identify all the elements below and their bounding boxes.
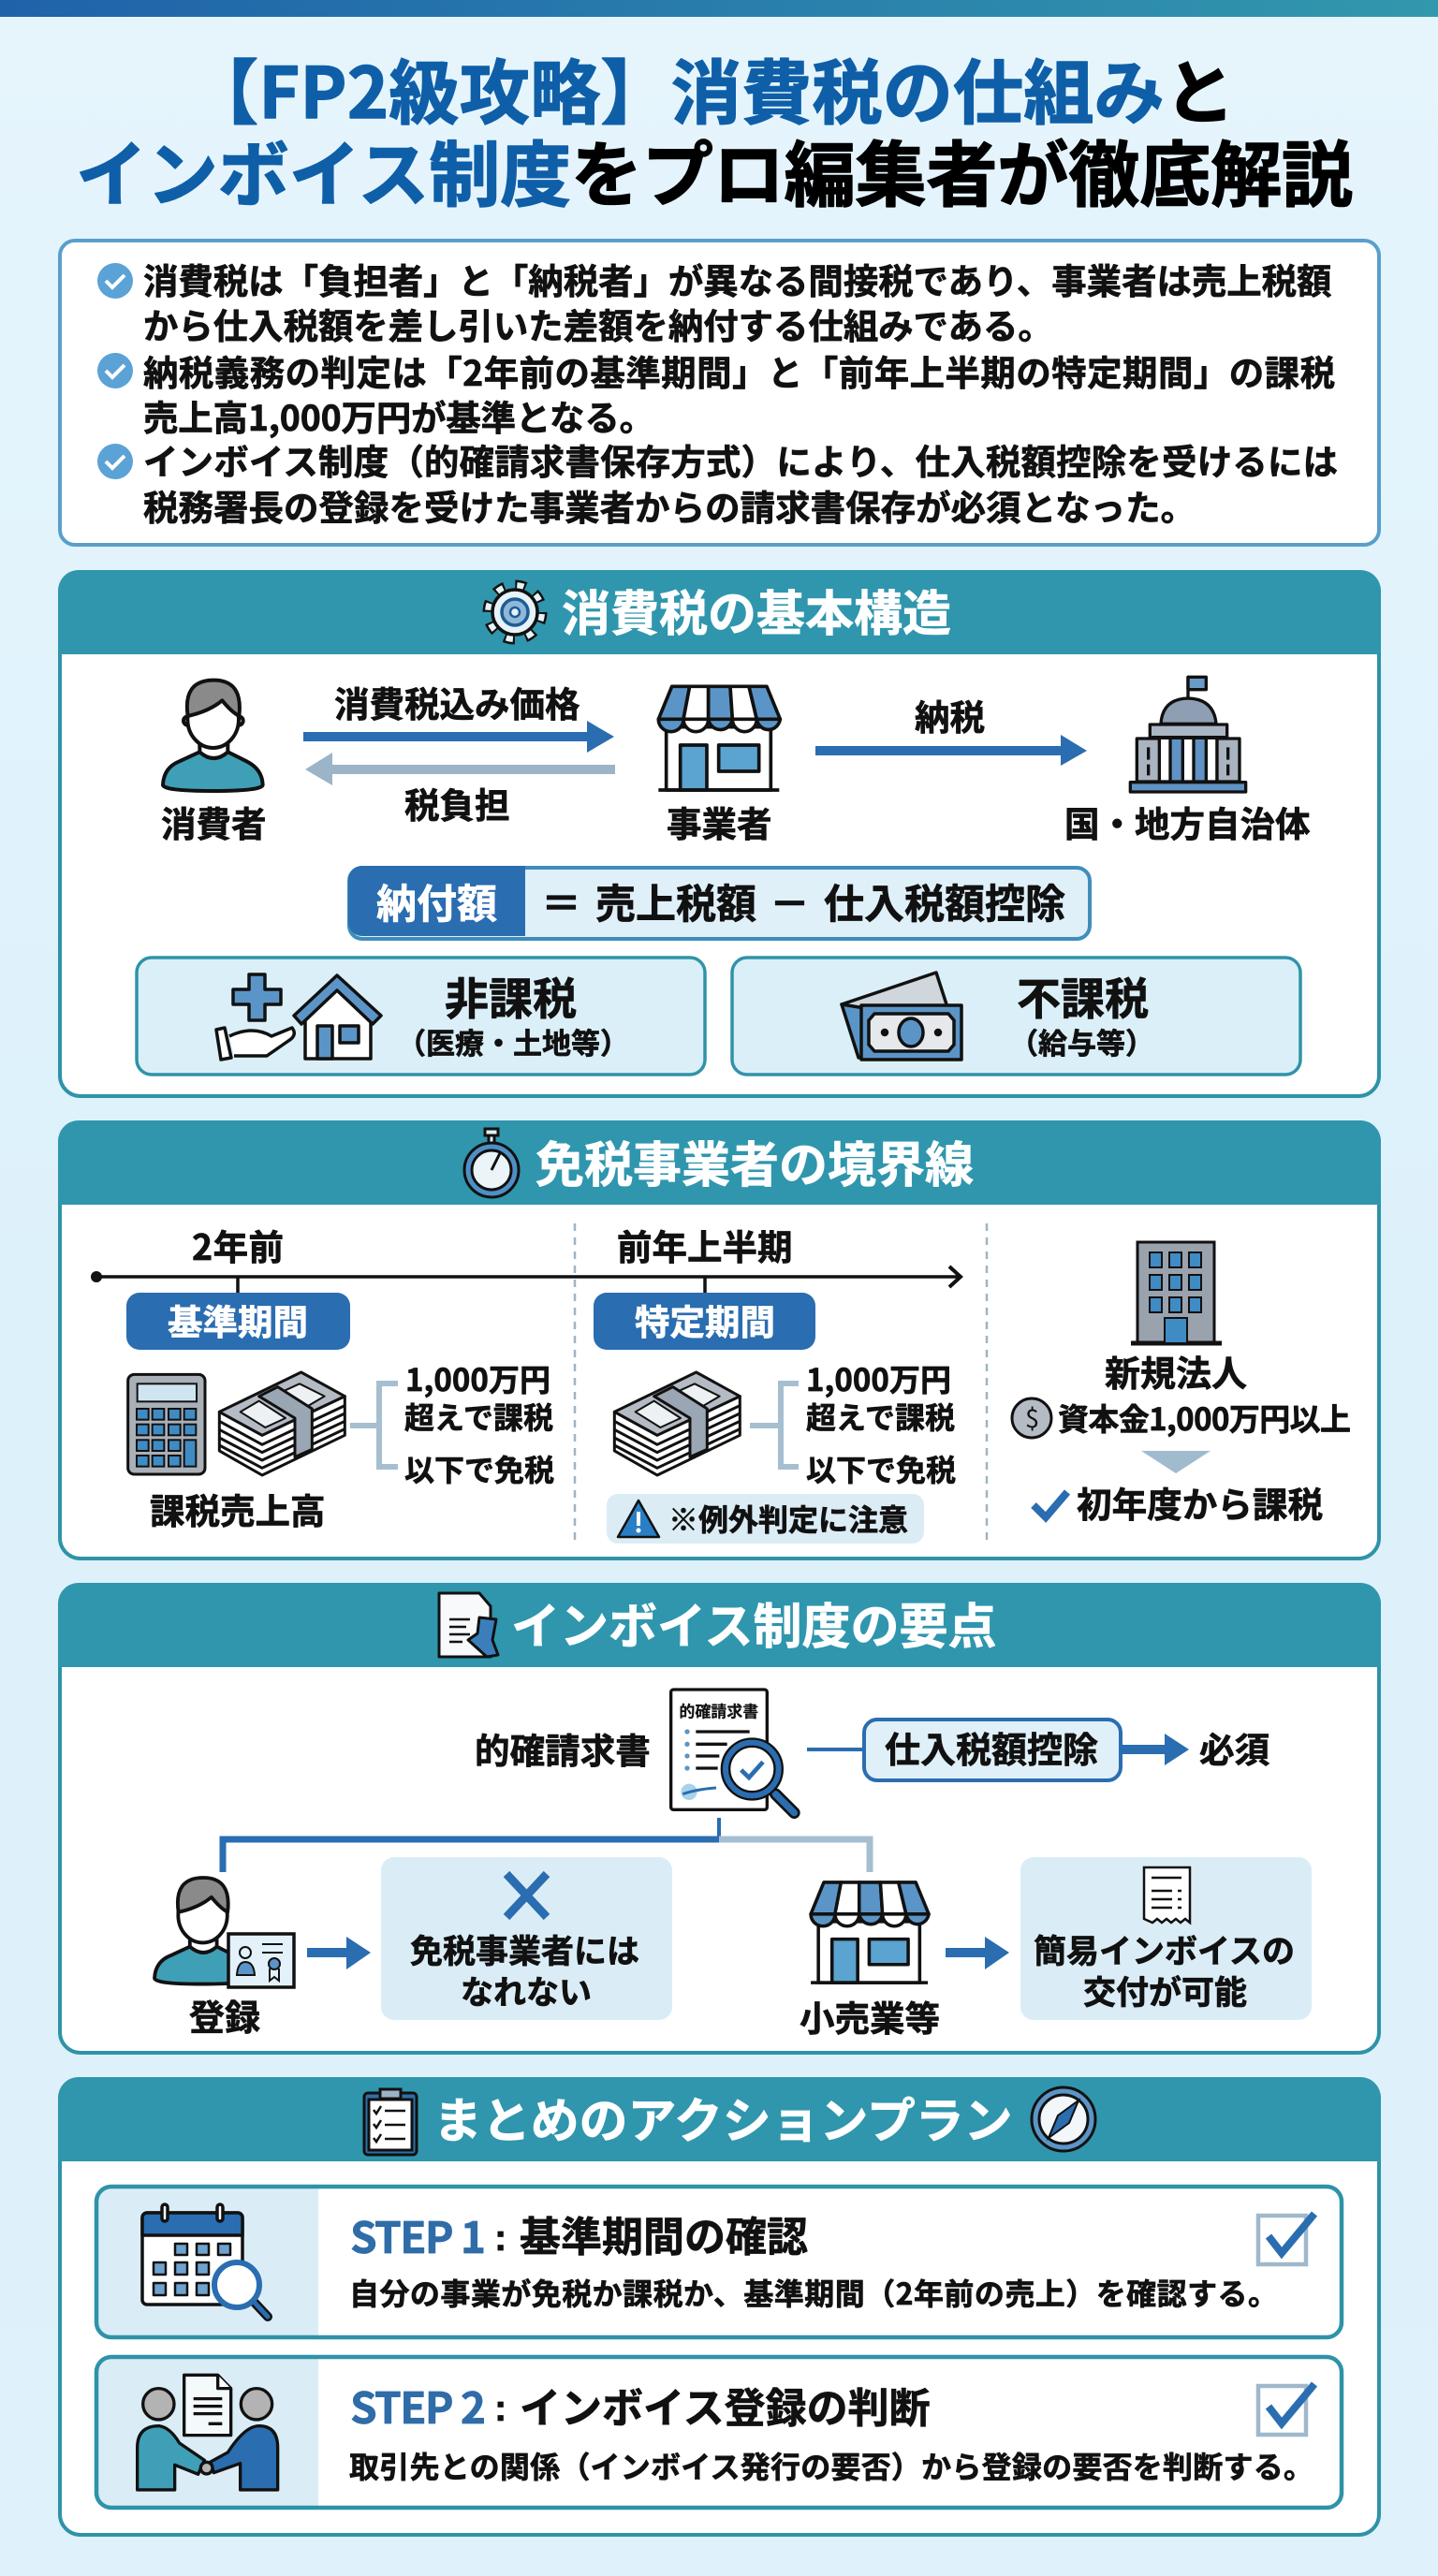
- formula: －: [770, 872, 810, 930]
- icon: banknotes: [842, 973, 961, 1060]
- tree connector: [223, 1818, 870, 1872]
- pill: base period: [126, 1293, 350, 1350]
- box: simplified invoice: 簡易インボイスの: [1034, 1925, 1295, 1973]
- bullet 1: [97, 254, 1331, 349]
- bullet 2: [97, 345, 1335, 441]
- label: tax payment: 納税: [915, 689, 985, 740]
- labels: threshold 1: 以下で免税: [404, 1447, 554, 1490]
- icon: compass: [1032, 2087, 1095, 2151]
- formula: 納付額: [376, 872, 497, 930]
- label: tax burden: 税負担: [404, 777, 509, 828]
- box: input tax deduction: 仕入税額控除: [885, 1721, 1098, 1773]
- formula: ＝: [541, 872, 581, 930]
- icon: retail store: [811, 1882, 929, 1983]
- label: retail etc: 小売業等: [800, 1990, 940, 2042]
- box: out of scope: 不課税: [1017, 963, 1149, 1028]
- pill: specific period: [594, 1293, 815, 1350]
- label: taxable sales: 課税売上高: [150, 1483, 326, 1534]
- icon: calculator: [128, 1374, 205, 1474]
- label: qualified invoice: 的確請求書: [475, 1722, 651, 1774]
- bullet 1: 消費税は「負担者」と「納税者」が異なる間接税であり、事業者は売上税額: [143, 254, 1331, 304]
- label: consumer: 消費者: [161, 796, 266, 847]
- arrow: registered outcome: [307, 1937, 371, 1969]
- callout: exception warning: ※例外判定に注意: [668, 1497, 908, 1540]
- result: taxable first year: 初年度から課税: [1077, 1476, 1323, 1528]
- step card 2: STEP 2: [350, 2375, 486, 2437]
- icon: calendar: [142, 2204, 268, 2317]
- panel: exemption boundary: [58, 1120, 1381, 1559]
- step card 1: STEP 1: [350, 2204, 486, 2266]
- bullet 3: 税務署長の登録を受けた事業者からの請求書保存が必須となった。: [143, 480, 1196, 531]
- box: cannot be exempt: なれない: [461, 1967, 592, 2014]
- formula: 仕入税額控除: [824, 872, 1065, 930]
- labels: threshold 1: 1,000万円: [405, 1355, 550, 1400]
- label: tax-inclusive price: 消費税込み価格: [334, 676, 580, 727]
- pill: specific period: 特定期間: [635, 1294, 775, 1345]
- labels: threshold 1: 超えで課税: [404, 1395, 553, 1438]
- box: out of scope: （給与等）: [1009, 1020, 1154, 1062]
- icon: handshake: [138, 2375, 278, 2490]
- step card 2: [96, 2357, 1342, 2508]
- labels: threshold 2: 以下で免税: [806, 1447, 956, 1490]
- icon: gear: [489, 586, 541, 638]
- icon: registered person with ID: [154, 1878, 294, 1987]
- box: cannot be exempt: 免税事業者には: [410, 1925, 639, 1973]
- timeline: 2年前: [192, 1219, 284, 1270]
- panel: basic structure: [58, 570, 1381, 1096]
- icon: qualified invoice: [671, 1690, 794, 1813]
- icon: store: [658, 686, 780, 790]
- label: registration: 登録: [189, 1989, 260, 2041]
- bracket 1: [350, 1383, 398, 1467]
- box: out of scope: [732, 958, 1300, 1075]
- heading: まとめのアクションプラン: [433, 2082, 1013, 2152]
- arrow: price: [303, 721, 614, 753]
- arrow: tax payment: [815, 735, 1087, 766]
- title: [76, 37, 1353, 221]
- title: インボイス制度をプロ編集者が徹底解説: [76, 118, 1353, 221]
- step card 1: 自分の事業が免税か課税か、基準期間（2年前の売上）を確認する。: [349, 2271, 1278, 2314]
- connector to deduction: [807, 1748, 863, 1751]
- label: new corporation: 新規法人: [1105, 1345, 1247, 1397]
- box: non-taxable: 非課税: [445, 963, 577, 1028]
- labels: threshold 1: [404, 1355, 554, 1490]
- formula: [348, 866, 1090, 939]
- icon: money stack 2: [614, 1372, 740, 1475]
- arrow: burden: [305, 753, 615, 785]
- icon: consumer: [163, 681, 263, 791]
- panel: invoice essentials: [58, 1583, 1381, 2053]
- step card 1: [96, 2187, 1342, 2337]
- callout: exception warning: [607, 1494, 924, 1544]
- step card 2: インボイス登録の判断: [520, 2375, 931, 2435]
- icon: stopwatch: [464, 1129, 519, 1197]
- icon: government building: [1130, 677, 1246, 792]
- labels: threshold 2: 超えで課税: [806, 1395, 955, 1438]
- step card 2: 取引先との関係（インボイス発行の要否）から登録の要否を判断する。: [349, 2444, 1313, 2487]
- icon: clipboard: [364, 2089, 417, 2155]
- icon: medical and house: [216, 974, 381, 1060]
- capital condition: $: [1025, 1398, 1039, 1435]
- icon: qualified invoice: 的確請求書: [679, 1698, 758, 1721]
- bullet 3: インボイス制度（的確請求書保存方式）により、仕入税額控除を受けるには: [143, 434, 1338, 485]
- icon: checkbox: [1258, 2384, 1314, 2435]
- arrow: retail outcome: [946, 1937, 1009, 1969]
- icon: document with stamp: [439, 1593, 498, 1657]
- pill: base period: 基準期間: [168, 1294, 308, 1345]
- heading: インボイス制度の要点: [511, 1588, 996, 1658]
- step card 1: 基準期間の確認: [520, 2203, 808, 2263]
- icon: checkbox: [1258, 2214, 1314, 2264]
- label: business: 事業者: [667, 796, 771, 847]
- labels: threshold 2: [806, 1355, 956, 1490]
- bullet 3: [97, 434, 1338, 531]
- box: non-taxable: （医療・土地等）: [397, 1020, 629, 1062]
- box: simplified invoice: 交付が可能: [1083, 1967, 1247, 2014]
- bullet 2: 売上高1,000万円が基準となる。: [143, 390, 654, 441]
- bullet 2: 納税義務の判定は「2年前の基準期間」と「前年上半期の特定期間」の課税: [143, 345, 1335, 396]
- box: simplified invoice: [1020, 1857, 1312, 2020]
- label: required: 必須: [1199, 1721, 1270, 1773]
- labels: threshold 2: 1,000万円: [806, 1355, 951, 1400]
- arrow: required: [1122, 1734, 1189, 1765]
- timeline: [91, 1219, 961, 1294]
- heading: 消費税の基本構造: [562, 575, 951, 645]
- icon: money stack 1: [219, 1372, 345, 1475]
- bracket 2: [750, 1383, 799, 1467]
- box: cannot be exempt: [381, 1857, 672, 2020]
- title: 【FP2級攻略】消費税の仕組みと: [188, 37, 1235, 139]
- formula: 売上税額: [595, 872, 756, 930]
- step card 2: :: [494, 2388, 506, 2429]
- bullet 1: から仕入税額を差し引いた差額を納付する仕組みである。: [143, 299, 1053, 349]
- label: government: 国・地方自治体: [1064, 796, 1311, 847]
- panel: key points: [60, 241, 1379, 545]
- capital condition: 資本金1,000万円以上: [1058, 1395, 1351, 1440]
- box: non-taxable: [137, 958, 705, 1075]
- heading: 免税事業者の境界線: [536, 1126, 974, 1196]
- arrow: down: [1141, 1451, 1211, 1473]
- icon: office building: [1131, 1242, 1222, 1343]
- timeline: 前年上半期: [617, 1219, 792, 1270]
- step card 1: :: [494, 2217, 506, 2259]
- panel: action plan: [58, 2077, 1381, 2535]
